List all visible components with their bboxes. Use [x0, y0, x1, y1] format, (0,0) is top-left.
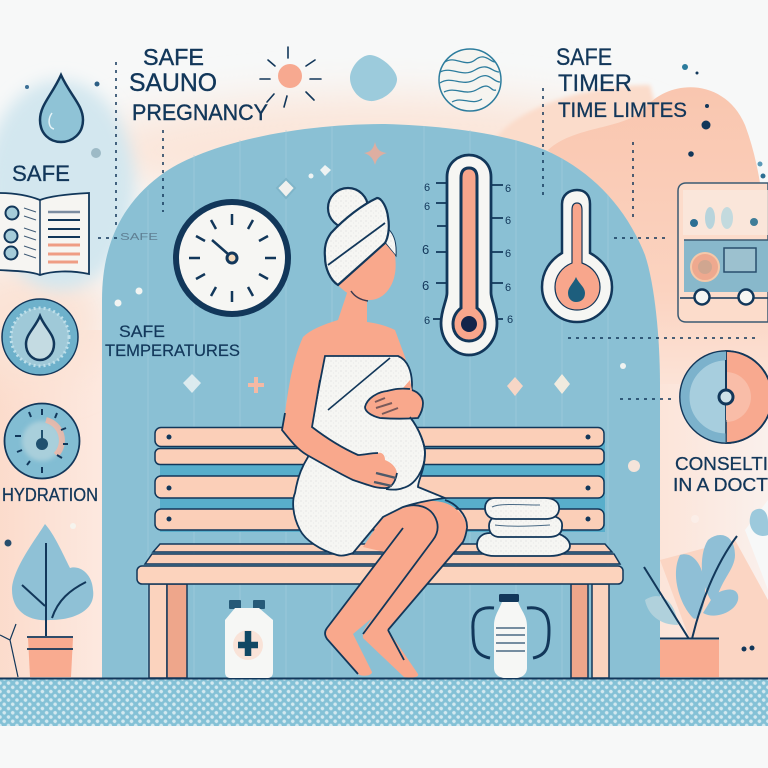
folded towels	[477, 498, 570, 556]
bench seat and legs	[137, 544, 623, 678]
icon: water bottle	[473, 594, 549, 678]
title: safe sauna pregnancy: SAFE	[143, 44, 204, 70]
icon: large thermometer: 6	[507, 314, 513, 326]
icon: large thermometer: 6	[505, 183, 511, 195]
turban	[325, 188, 389, 285]
icon: clock	[176, 202, 288, 314]
icon: left plant	[0, 524, 93, 677]
icon: right gauge	[680, 351, 768, 443]
left arm and hand	[282, 380, 397, 488]
label: safe temperatures: TEMPERATURES	[105, 341, 240, 360]
label: safe temperatures: SAFE	[119, 322, 165, 341]
title: safe sauna pregnancy	[129, 44, 268, 125]
upper hand	[365, 380, 423, 419]
icon: large thermometer: 6	[424, 182, 430, 194]
neck and shoulders	[282, 290, 412, 430]
icon: dial	[4, 404, 80, 478]
label: consulting a doctor	[673, 453, 768, 495]
arm outline	[282, 413, 397, 488]
label: safe: SAFE	[12, 161, 70, 186]
heading: safe timer	[556, 44, 687, 122]
label: consulting a doctor: IN A DOCT	[673, 474, 768, 495]
towel fold	[328, 358, 390, 410]
title: safe sauna pregnancy: PREGNANCY	[132, 100, 268, 125]
panel: timer device	[678, 183, 768, 322]
icon: large thermometer: 6	[422, 278, 429, 293]
face	[338, 243, 396, 300]
icon: sun	[260, 47, 321, 107]
sauna wall arch	[102, 124, 660, 680]
upper hand outline	[365, 389, 423, 419]
icon: hydration disc	[2, 299, 78, 375]
icon: open book	[0, 193, 89, 275]
icon: small thermometer	[542, 190, 612, 322]
label: safe temperatures	[105, 322, 240, 360]
icon: wave circle	[439, 49, 501, 111]
icon: large thermometer: 6	[424, 201, 430, 213]
fingers of lower hand	[374, 473, 396, 486]
floor	[0, 678, 768, 726]
leg outlines	[325, 500, 467, 674]
icon: right plant	[644, 509, 768, 677]
icon: large thermometer	[422, 155, 513, 355]
bench backrest	[155, 428, 605, 532]
icon: blue blob	[350, 55, 397, 101]
towel body	[293, 356, 445, 556]
label: hydration: HYDRATION	[2, 485, 98, 505]
fingers of upper hand	[375, 398, 398, 414]
heading: safe timer: TIMER	[558, 70, 632, 97]
woman seated	[282, 188, 467, 678]
icon: water drop	[40, 75, 83, 142]
legs	[325, 501, 467, 678]
decorative sparkles and dots	[4, 64, 766, 652]
dashed leader lines	[98, 62, 760, 399]
icon: large thermometer: 6	[505, 248, 511, 260]
chin line	[351, 291, 368, 301]
icon: large thermometer: 6	[505, 282, 511, 294]
icon: large thermometer: 6	[424, 315, 430, 327]
back turban piece	[383, 226, 396, 256]
heading: safe timer: TIME LIMTES	[558, 99, 687, 122]
label: consulting a doctor: CONSELTI	[675, 453, 768, 474]
belly contour	[386, 417, 425, 490]
icon: first aid bottle	[225, 600, 273, 678]
icon: large thermometer: 6	[505, 215, 511, 227]
heading: safe timer: SAFE	[556, 44, 612, 71]
icon: large thermometer: 6	[422, 242, 429, 257]
label: small safe: SAFE	[120, 232, 158, 243]
title: safe sauna pregnancy: SAUNO	[129, 69, 217, 97]
